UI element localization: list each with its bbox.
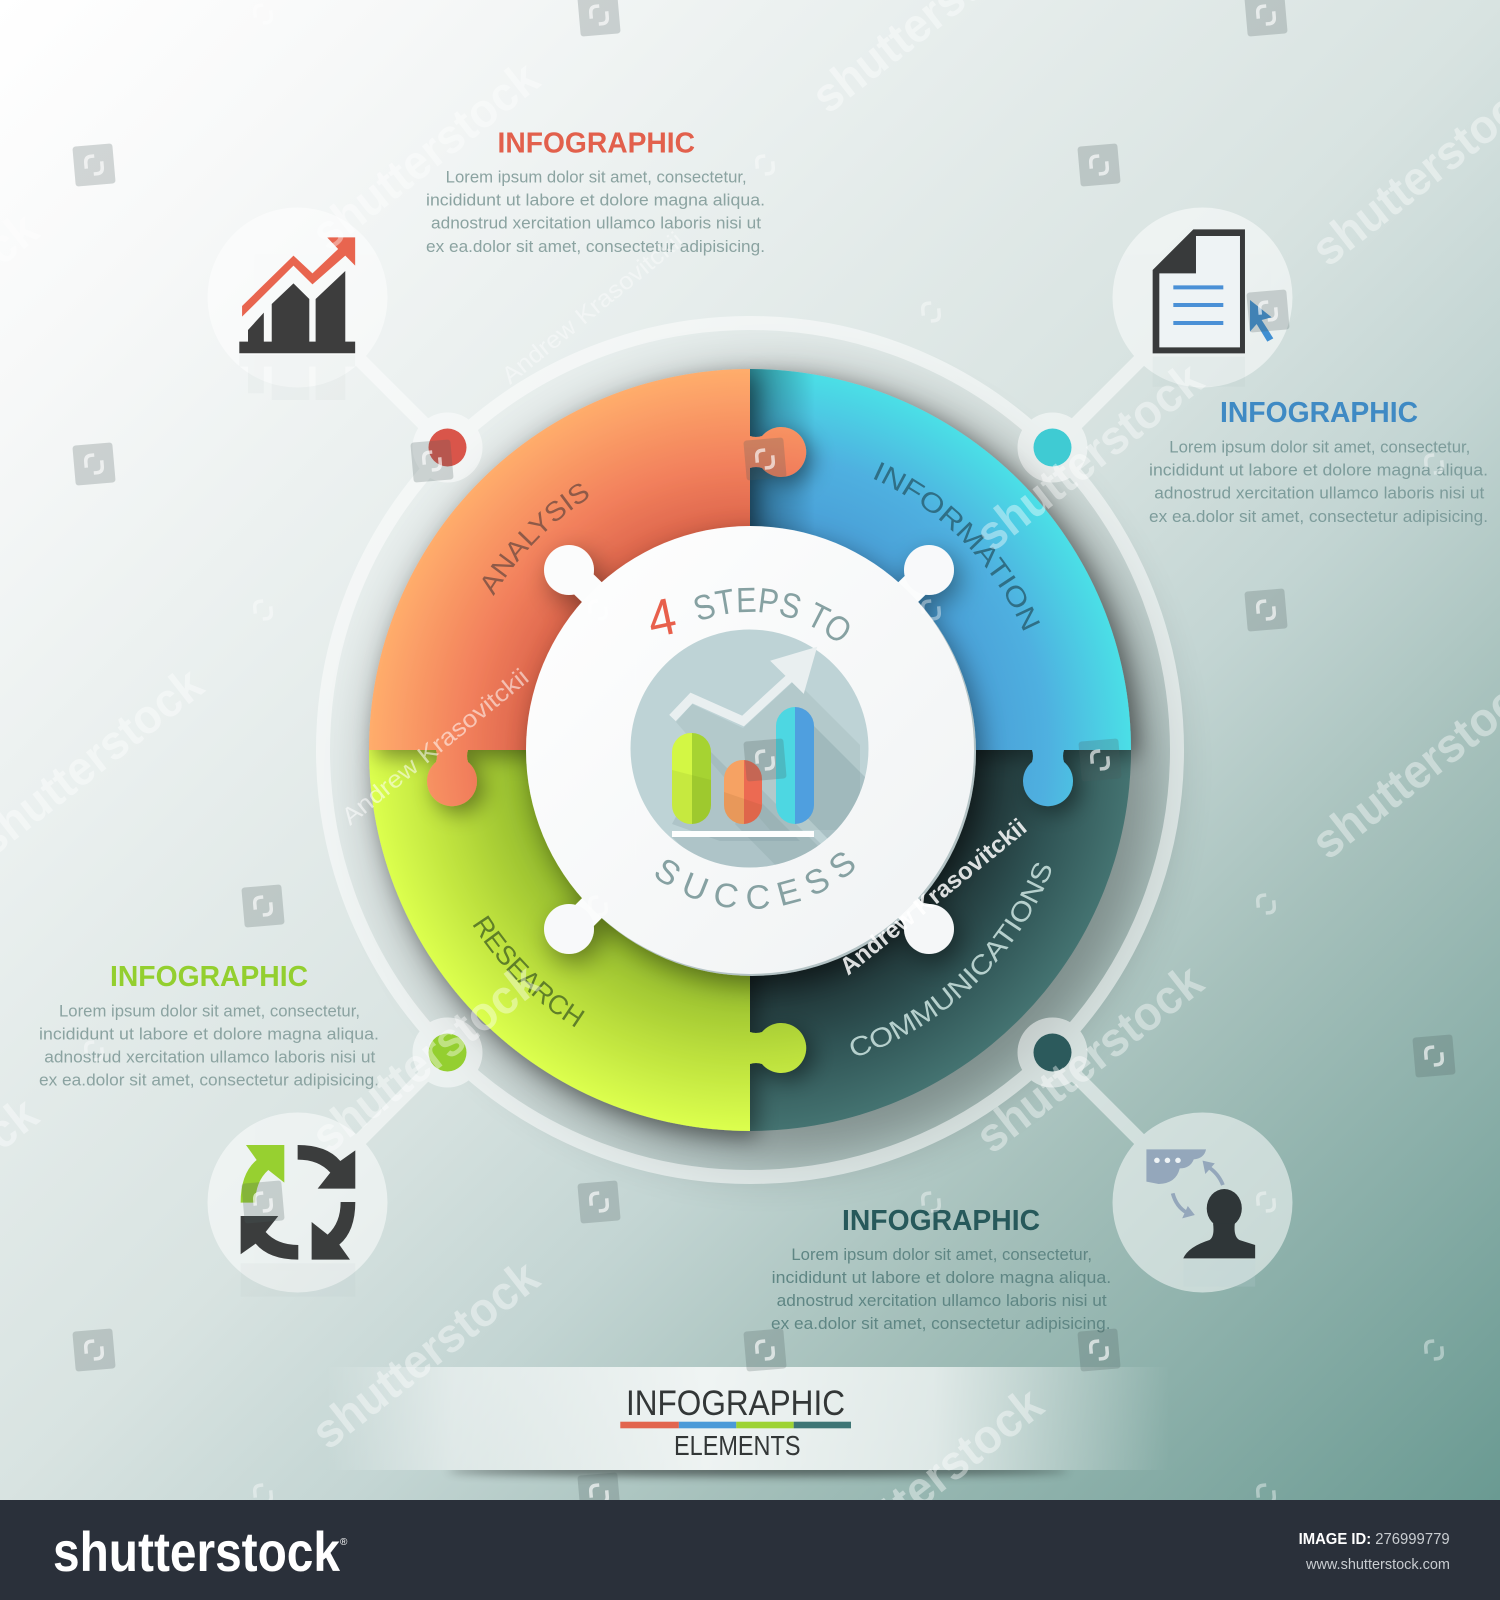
curved title: 4: 4 bbox=[642, 586, 681, 649]
text block: analysis: adnostrud xercitation ullamco laboris nisi ut bbox=[431, 215, 761, 233]
bottom banner bbox=[326, 1367, 1170, 1475]
text block: analysis: INFOGRAPHIC bbox=[498, 128, 695, 160]
segment label: communications: COMMUNICATIONS bbox=[850, 862, 1052, 1056]
text block: research: Lorem ipsum dolor sit amet, consectetur, bbox=[59, 1002, 360, 1020]
banner subtitle: ELEMENTS bbox=[674, 1430, 800, 1461]
segment: analysis bbox=[369, 369, 806, 806]
bar orange bbox=[724, 760, 762, 824]
text block: communications: ex ea.dolor sit amet, consectetur adipisicing. bbox=[771, 1315, 1110, 1333]
watermark layer: Andrew Krasovitckii bbox=[497, 227, 689, 390]
watermark layer: shutterstock bbox=[302, 51, 549, 261]
bar green bbox=[672, 733, 711, 824]
watermark layer: shutterstock bbox=[302, 1250, 549, 1460]
rising arrow bbox=[672, 649, 815, 721]
banner color stripes bbox=[620, 1422, 851, 1428]
text block: research: incididunt ut labore et dolore magna aliqua. bbox=[39, 1025, 379, 1043]
text block: communications: incididunt ut labore et dolore magna aliqua. bbox=[772, 1269, 1111, 1287]
segment: communications bbox=[750, 750, 1131, 1131]
curved title: steps to: STEPS TO bbox=[694, 588, 850, 640]
icon: rising chart bbox=[239, 237, 355, 400]
text block: communications bbox=[771, 1205, 1111, 1333]
text block: communications: adnostrud xercitation ullamco laboris nisi ut bbox=[777, 1292, 1107, 1310]
shade on information edge bbox=[750, 369, 809, 534]
text block: information: ex ea.dolor sit amet, consectetur adipisicing. bbox=[1149, 508, 1488, 526]
text block: research bbox=[39, 961, 379, 1090]
segment label: research: RESEARCH bbox=[472, 916, 585, 1028]
node dot: research bbox=[428, 1034, 466, 1072]
node dot: communications bbox=[1034, 1034, 1072, 1072]
watermark layer: Andrew Krasovitckii bbox=[337, 664, 534, 831]
segment label: information: INFORMATION bbox=[874, 462, 1040, 630]
node dot: information bbox=[1034, 428, 1072, 466]
segment: information bbox=[750, 369, 1131, 806]
watermark layer: shutterstock bbox=[966, 954, 1213, 1164]
connector ring with nodes and icon discs bbox=[208, 208, 1292, 1292]
watermark layer: shutterstock bbox=[806, 1377, 1053, 1587]
icon: document with cursor bbox=[1153, 229, 1273, 387]
watermark layer: shutterstock bbox=[302, 954, 549, 1164]
node dot: analysis bbox=[428, 428, 466, 466]
center badge: chart icon bbox=[630, 630, 868, 868]
center puzzle disc bbox=[526, 526, 976, 976]
text block: information: INFOGRAPHIC bbox=[1220, 397, 1418, 429]
text block: information: incididunt ut labore et dolore magna aliqua. bbox=[1149, 462, 1488, 480]
text block: information: adnostrud xercitation ullamco laboris nisi ut bbox=[1154, 485, 1485, 503]
text block: analysis bbox=[426, 128, 765, 256]
banner title: INFOGRAPHIC bbox=[626, 1384, 845, 1423]
text block: information: Lorem ipsum dolor sit amet, consectetur, bbox=[1169, 438, 1470, 456]
footer bar bbox=[0, 1500, 1500, 1600]
watermark layer: shutterstock bbox=[966, 352, 1213, 562]
icon: person and speech bubble bbox=[1146, 1149, 1255, 1287]
baseline bbox=[672, 831, 814, 837]
curved title: success: SUCCESS bbox=[656, 852, 854, 909]
text block: communications: INFOGRAPHIC bbox=[842, 1205, 1040, 1237]
watermark layer: Andrew Krasovitckii bbox=[835, 814, 1032, 981]
text block: communications: Lorem ipsum dolor sit amet, consectetur, bbox=[791, 1246, 1092, 1264]
registered mark: ® bbox=[340, 1537, 348, 1548]
wheel cast shadow bbox=[376, 376, 1160, 1160]
puzzle wheel bbox=[369, 369, 1131, 1131]
segment label: analysis: ANALYSIS bbox=[482, 484, 588, 596]
text block: research: ex ea.dolor sit amet, consectetur adipisicing. bbox=[39, 1072, 379, 1090]
long shadows bbox=[672, 682, 865, 868]
text block: analysis: Lorem ipsum dolor sit amet, consectetur, bbox=[446, 169, 747, 187]
segment: research bbox=[369, 750, 806, 1131]
icon: cycle arrows bbox=[241, 1145, 355, 1297]
footer logo: shutterstock bbox=[53, 1520, 341, 1583]
bar blue bbox=[776, 707, 814, 824]
text block: analysis: incididunt ut labore et dolore magna aliqua. bbox=[426, 192, 765, 210]
text block: research: INFOGRAPHIC bbox=[110, 961, 308, 993]
website: www.shutterstock.com bbox=[1305, 1556, 1450, 1573]
text block: information bbox=[1149, 397, 1488, 526]
text block: research: adnostrud xercitation ullamco laboris nisi ut bbox=[44, 1048, 376, 1066]
text block: analysis: ex ea.dolor sit amet, consectetur adipisicing. bbox=[426, 238, 765, 256]
image id: IMAGE ID: 276999779 bbox=[1299, 1531, 1450, 1548]
